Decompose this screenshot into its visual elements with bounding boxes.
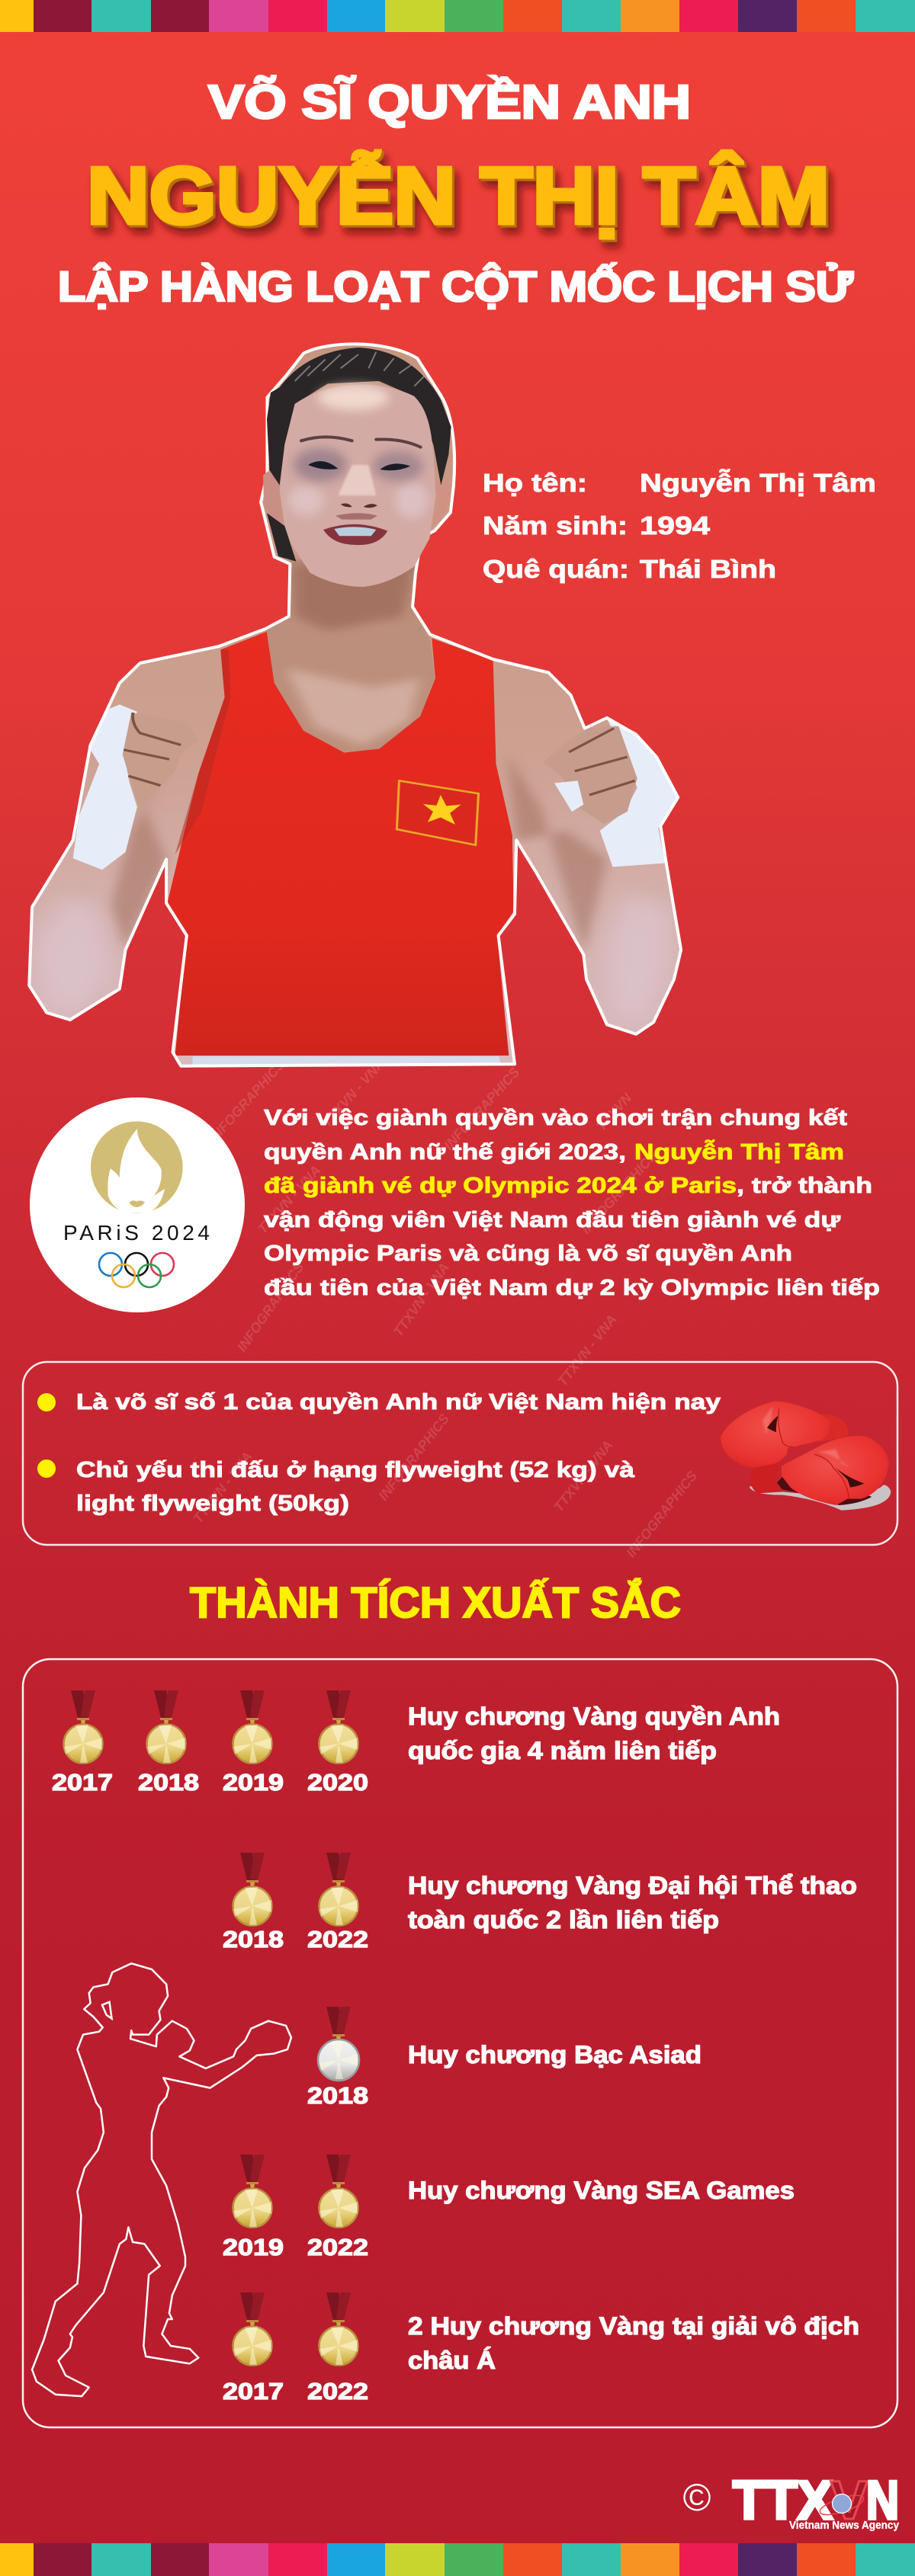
forehead highlight <box>318 385 389 410</box>
personal information: Nguyễn Thị Tâm <box>640 469 876 497</box>
eye shadows <box>294 448 347 482</box>
watermarks: TTXVN - VNA <box>190 1449 255 1526</box>
flag patch <box>396 780 479 845</box>
TTXVN logo: V <box>830 2471 868 2531</box>
front glove cuff <box>751 1463 784 1493</box>
fact 2 <box>76 1458 635 1516</box>
row 1: national championship gold medals: 2017 <box>52 1769 113 1796</box>
icon: boxing gloves <box>721 1401 891 1511</box>
watermarks <box>190 1056 700 1560</box>
row 4: SEA Games gold medals: Huy chương Vàng SEA Games <box>408 2177 795 2204</box>
bullet 1 <box>37 1393 56 1411</box>
right hand wrap <box>600 719 678 867</box>
row 2: national sports games gold medals <box>223 1853 857 1953</box>
row 1: national championship gold medals: 2018 <box>138 1769 199 1796</box>
personal information: Họ tên: <box>483 469 587 497</box>
TTXVN logo: Vietnam News Agency <box>789 2519 900 2532</box>
row 1: national championship gold medals <box>52 1690 780 1796</box>
watermarks: TTXVN <box>593 1090 635 1134</box>
watermarks: TTXVN - VNA <box>390 1260 452 1339</box>
watermarks: TTXVN - VNA <box>255 1162 324 1237</box>
TTXVN logo <box>733 2471 900 2532</box>
panel: key facts <box>23 1362 897 1545</box>
intro paragraph: Nguyễn Thị Tâm <box>634 1139 844 1165</box>
top colour strip <box>0 0 915 32</box>
watermarks: INFOGRAPHICS <box>623 1468 700 1560</box>
glove shadow <box>750 1485 891 1511</box>
intro paragraph: vận động viên Việt Nam đầu tiên giành vé dự <box>264 1208 840 1232</box>
intro paragraph: quyền Anh nữ thế giới 2023, <box>264 1140 626 1165</box>
title line 1: VÕ SĨ QUYỀN ANH <box>208 76 691 129</box>
watermarks: TTXVN - VNA <box>554 1312 620 1389</box>
athlete photo cut-out <box>0 335 700 1082</box>
personal information: Năm sinh: <box>483 511 628 540</box>
row 1: national championship gold medals: 2019 <box>223 1769 284 1796</box>
back glove <box>721 1401 830 1468</box>
right fist <box>552 726 637 824</box>
jersey <box>168 632 513 1056</box>
Paris flame emblem <box>91 1121 183 1213</box>
intro paragraph: đã giành vé dự Olympic 2024 ở Paris <box>264 1174 737 1198</box>
row 4: SEA Games gold medals: 2019 <box>223 2234 284 2260</box>
title line 3: LẬP HÀNG LOẠT CỘT MỐC LỊCH SỬ <box>58 262 854 310</box>
eyes <box>308 461 338 469</box>
Paris 2024 logo <box>30 1097 245 1312</box>
copyright mark: © <box>683 2476 711 2519</box>
bottom colour strip <box>0 2543 915 2576</box>
row 3: Asiad silver medal: Huy chương Bạc Asiad <box>408 2041 702 2068</box>
olympic rings <box>99 1253 174 1287</box>
row 2: national sports games gold medals: toàn quốc 2 lần liên tiếp <box>408 1906 719 1934</box>
smile <box>323 524 387 545</box>
row 1: national championship gold medals: quốc gia 4 năm liên tiếp <box>408 1737 717 1764</box>
intro paragraph <box>264 1106 880 1300</box>
row 2: national sports games gold medals: 2018 <box>223 1926 284 1953</box>
TTXVN logo: TTX <box>733 2471 833 2531</box>
skin base <box>30 345 679 1065</box>
TTXVN logo: N <box>866 2471 899 2531</box>
intro paragraph: Với việc giành quyền vào chơi trận chung kết <box>264 1106 847 1130</box>
watermarks: INFOGRAPHICS <box>441 1065 522 1153</box>
body shapes clipped to silhouette <box>30 345 680 1065</box>
personal information: Thái Bình <box>640 555 776 583</box>
title name: NGUYỄN THỊ TÂM <box>87 150 830 241</box>
watermarks: INFOGRAPHICS <box>375 1411 452 1503</box>
personal information <box>483 469 876 583</box>
ears <box>263 467 284 522</box>
row 2: national sports games gold medals: 2022 <box>307 1926 368 1953</box>
nose <box>338 465 376 495</box>
watermarks: TTXVN - VNA <box>319 1056 388 1130</box>
trunks waistband <box>192 1056 501 1065</box>
heading: achievements: THÀNH TÍCH XUẤT SẮC <box>190 1578 681 1627</box>
boxer silhouette outline <box>32 1963 291 2396</box>
row 4: SEA Games gold medals <box>223 2155 795 2260</box>
head <box>263 348 451 587</box>
fact 2: Chủ yếu thi đấu ở hạng flyweight (52 kg) và <box>76 1458 635 1482</box>
fact 1: Là võ sĩ số 1 của quyền Anh nữ Việt Nam hiện nay <box>76 1390 721 1415</box>
intro paragraph: đầu tiên của Việt Nam dự 2 kỳ Olympic liên tiếp <box>264 1276 880 1300</box>
bullet 2 <box>37 1459 56 1478</box>
title <box>58 76 854 310</box>
arm shading <box>107 806 170 947</box>
row 2: national sports games gold medals: Huy chương Vàng Đại hội Thể thao <box>408 1872 857 1899</box>
row 5: Asian championship gold medals <box>223 2292 859 2405</box>
row 3: Asiad silver medal <box>307 2007 702 2109</box>
row 1: national championship gold medals: Huy chương Vàng quyền Anh <box>408 1703 780 1730</box>
personal information: Quê quán: <box>483 555 629 583</box>
brows <box>301 437 421 447</box>
back glove cuff <box>818 1414 848 1442</box>
watermarks: INFOGRAPHICS <box>234 1260 307 1354</box>
cheek highlights <box>288 485 324 516</box>
personal information: 1994 <box>640 511 711 540</box>
face <box>280 385 436 587</box>
intro paragraph: , trở thành <box>737 1174 872 1198</box>
front glove <box>782 1436 889 1505</box>
neck and chest <box>265 559 435 752</box>
watermarks: TTXVN - VNA <box>551 1437 616 1514</box>
row 4: SEA Games gold medals: 2022 <box>307 2234 368 2260</box>
row 5: Asian championship gold medals: 2017 <box>223 2378 284 2405</box>
fact 2: light flyweight (50kg) <box>76 1491 349 1516</box>
row 5: Asian championship gold medals: châu Á <box>408 2347 496 2374</box>
row 1: national championship gold medals: 2020 <box>307 1769 368 1796</box>
watermarks: INFOGRAPHICS <box>206 1057 287 1145</box>
watermarks: INFOGRAPHICS <box>578 1149 660 1237</box>
silhouette white outline <box>29 344 681 1066</box>
intro paragraph: Olympic Paris và cũng là võ sĩ quyền Anh <box>264 1242 792 1266</box>
row 5: Asian championship gold medals: 2022 <box>307 2378 368 2405</box>
hair <box>267 348 451 485</box>
row 5: Asian championship gold medals: 2 Huy chương Vàng tại giải vô địch <box>408 2312 859 2340</box>
logo wordmark: PARiS 2024 <box>63 1221 210 1245</box>
left fist <box>122 712 181 810</box>
left hand wrap <box>73 704 137 870</box>
panel: achievements <box>23 1659 897 2427</box>
row 3: Asiad silver medal: 2018 <box>307 2082 368 2109</box>
